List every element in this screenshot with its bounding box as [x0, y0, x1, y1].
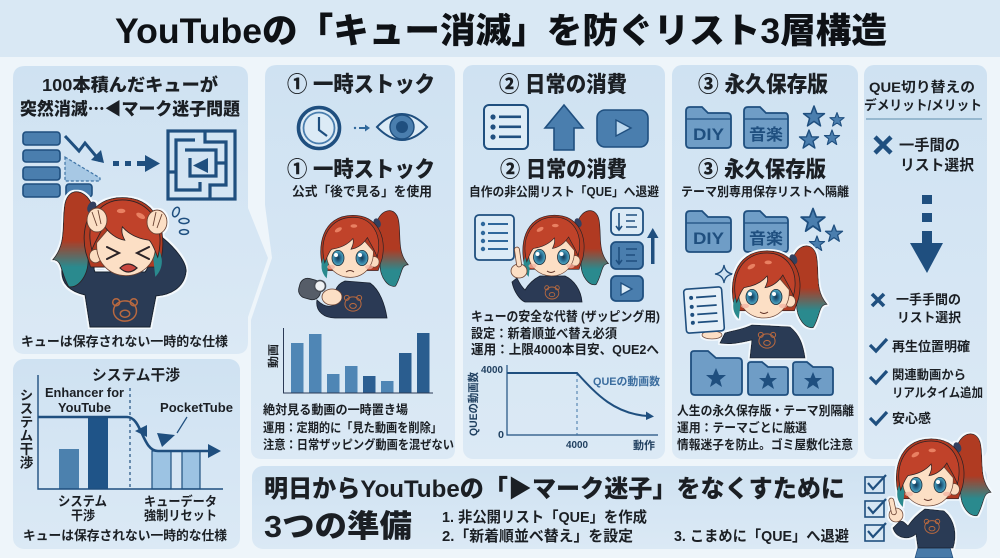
- icons: folders and stars row 2: [686, 208, 843, 252]
- arrow: clock to eye: [354, 124, 370, 132]
- caption: キューは保存されない一時的な仕様: [23, 528, 227, 543]
- text block 2: キューの安全な代替 (ザッピング用): [471, 309, 660, 324]
- chart: QUE count line: [466, 364, 660, 452]
- merit list: リスト選択: [897, 310, 961, 325]
- character: girl with watch: [297, 211, 408, 318]
- text block 3: [677, 403, 854, 452]
- chart: QUE count line: QUEの動画数: [466, 372, 480, 436]
- subheading 1: [287, 157, 435, 199]
- character: worried girl: [53, 192, 186, 327]
- chart: interference: 強制リセット: [144, 508, 217, 523]
- merit list: 再生位置明確: [892, 339, 970, 354]
- subheading 3: [681, 157, 849, 199]
- character: pointing girl: [511, 211, 608, 302]
- icons: star folders: [691, 351, 833, 395]
- icon: queue list bars: [23, 132, 92, 197]
- panel 1: temporary stock: [251, 65, 455, 459]
- icon: list card: [475, 215, 514, 260]
- heading: action: 明日からYouTubeの「▶マーク迷子」をなくすために: [264, 475, 845, 503]
- text block 1: [263, 402, 454, 452]
- merit list: [870, 292, 983, 426]
- text block 2: [471, 309, 660, 357]
- heading: problem: 突然消滅…◀マーク迷子問題: [20, 96, 240, 121]
- demerit: リスト選択: [900, 157, 974, 174]
- text block 3: 情報迷子を防止。ゴミ屋敷化注意: [677, 437, 853, 452]
- heading: システム干渉: [92, 367, 180, 384]
- chart: video bars: 動画: [266, 344, 280, 368]
- panel: call to action banner: [252, 466, 987, 549]
- icon: play: [597, 110, 648, 147]
- heading 4: [864, 79, 982, 119]
- chart: interference: キューデータ: [144, 494, 217, 509]
- chart: QUE count line: 0: [498, 429, 504, 441]
- text block 1: 絶対見る動画の一時置き場: [263, 402, 408, 417]
- icon: list: [484, 105, 528, 149]
- character: bottom right girl: [888, 434, 991, 558]
- text block 1: 注意：日常ザッピング動画を混ぜない: [263, 437, 454, 452]
- heading 4: デメリット/メリット: [864, 97, 982, 113]
- icon: eye: [377, 114, 427, 140]
- icon: held list card: [684, 287, 724, 333]
- title banner: [0, 0, 1000, 57]
- subheading 3: ③ 永久保存版: [698, 157, 826, 182]
- y axis label: システム干渉: [18, 388, 33, 470]
- subheading 2: ② 日常の消費: [500, 157, 627, 182]
- chart: QUE count line: 4000: [566, 439, 588, 451]
- chart: interference: 干渉: [71, 508, 95, 523]
- subheading 3: テーマ別専用保存リストへ隔離: [681, 184, 849, 199]
- icons: folders and stars row 2: 音楽: [749, 229, 783, 248]
- heading 3: ③ 永久保存版: [698, 72, 828, 97]
- panel 4: QUE switch trade-offs: [864, 65, 987, 459]
- text block 2: 運用：上限4000本目安、QUE2へ: [471, 342, 659, 357]
- icons: folders and stars row 1: [686, 106, 844, 148]
- steps: 3. こまめに「QUE」へ退避: [674, 527, 849, 545]
- steps: [442, 508, 849, 545]
- subheading 2: 自作の非公開リスト「QUE」へ退避: [469, 184, 659, 199]
- chart: video bars: [266, 328, 433, 393]
- merit list: 一手手間の: [896, 292, 961, 307]
- chart: interference: システム: [58, 494, 107, 509]
- merit list: 安心感: [892, 411, 931, 426]
- chart: QUE count line: QUEの動画数: [593, 374, 660, 388]
- chart: QUE count line: 4000: [481, 364, 503, 376]
- subheading 1: ① 一時ストック: [287, 157, 435, 182]
- arrow: up: [647, 228, 658, 264]
- demerit: 一手間の: [899, 137, 960, 154]
- heading: problem: 100本積んだキューが: [42, 75, 219, 95]
- caption: problem: キューは保存されない一時的な仕様: [21, 334, 228, 349]
- steps: 1. 非公開リスト「QUE」を作成: [442, 508, 647, 526]
- icons: folders and stars row 1: 音楽: [749, 125, 783, 144]
- text block 3: 人生の永久保存版・テーマ別隔離: [677, 403, 854, 418]
- demerit: [875, 137, 974, 174]
- merit list: リアルタイム追加: [892, 385, 983, 400]
- arrow: dotted to maze: [113, 155, 160, 172]
- subheading 1: 公式「後で見る」を使用: [292, 184, 432, 199]
- heading 2: ② 日常の消費: [499, 72, 627, 97]
- face: squeezed eyes: [107, 247, 149, 272]
- heading: three preparations: 3つの準備: [264, 509, 412, 544]
- panel: system interference: [13, 359, 240, 549]
- icon: up arrow: [545, 105, 583, 150]
- merit list: 関連動画から: [892, 367, 966, 382]
- icon: sweat drops: [171, 206, 189, 234]
- icon: maze: [168, 131, 235, 199]
- panel 3: permanent archive: [672, 65, 858, 459]
- character: girl holding list: [702, 246, 827, 358]
- icons: sort and play stack: [611, 208, 643, 301]
- text block 1: 運用：定期的に「見た動画を削除」: [263, 420, 442, 435]
- subheading 2: [469, 157, 659, 199]
- steps: 2.「新着順並べ替え」を設定: [442, 527, 633, 545]
- icons: folders and stars row 2: DIY: [693, 229, 725, 248]
- panel: problem: [13, 66, 268, 354]
- heading 4: QUE切り替えの: [869, 79, 975, 95]
- panel 2: daily consumption: [463, 65, 665, 459]
- text block 3: 運用：テーマごとに厳選: [677, 420, 807, 435]
- heading 1: ① 一時ストック: [287, 72, 435, 97]
- chart: interference: PocketTube: [160, 400, 233, 415]
- chart: QUE count line: 動作: [633, 438, 655, 452]
- icon: sparkle: [715, 265, 733, 283]
- text block 2: 設定：新着順並べ替え必須: [471, 326, 617, 341]
- icon: falling arrow: [65, 136, 104, 181]
- chart: interference: YouTube: [58, 400, 111, 415]
- icons: folders and stars row 1: DIY: [693, 125, 725, 144]
- hands on head: [87, 208, 167, 234]
- arrow: down dotted: [910, 195, 943, 273]
- icon: checkboxes: [865, 475, 886, 541]
- icon: clock: [298, 108, 340, 148]
- heading: problem: [20, 75, 240, 121]
- title: YouTubeの「キュー消滅」を防ぐリスト3層構造: [115, 12, 887, 51]
- labels: Enhancer for: [45, 385, 124, 400]
- chart: interference: [18, 375, 233, 523]
